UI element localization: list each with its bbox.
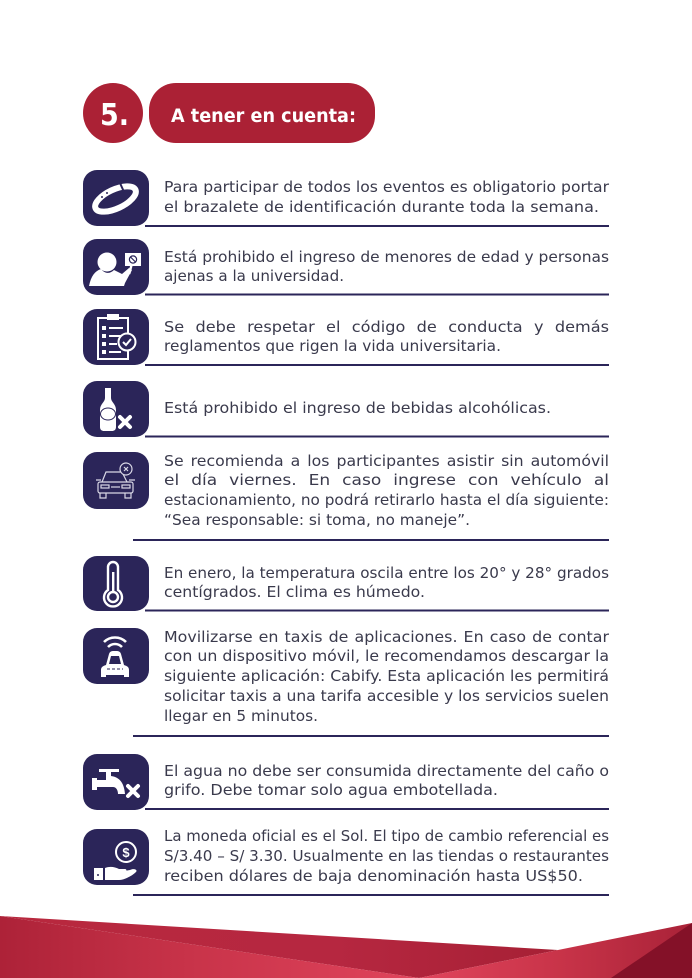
icon: hand holding coin: $ [122,845,130,860]
text: bracelet rule: el brazalete de identificación durante toda la semana. [164,198,599,216]
text: code of conduct: Se debe respetar el código de conducta y demás [164,318,609,336]
text: no car [164,452,609,529]
text: no car: Se recomienda a los participantes asistir sin automóvil [164,452,609,470]
text: temperature [164,564,609,601]
text: app taxis: siguiente aplicación: Cabify. Esta aplicación les permitirá [164,667,609,685]
item 1: bracelet rule [83,170,610,226]
text: app taxis: llegar en 5 minutos. [164,707,318,725]
section number badge: 5. [100,98,129,133]
text: no car: el día viernes. En caso ingrese con vehículo al [164,471,609,489]
text: currency: S/3.40 – S/ 3.30. Usualmente en las tiendas o restaurantes [164,847,609,865]
item 7: app taxis [83,628,610,736]
icon: clipboard with check [98,314,136,359]
text: minors prohibited [164,248,609,285]
item 9: currency [83,827,609,895]
icon: bracelet [92,181,139,217]
footer: red angular band [0,916,692,978]
text: no car: estacionamiento, no podrá retirarlo hasta el día siguiente: [164,491,609,509]
text: currency: reciben dólares de baja denominación hasta US$50. [164,867,583,885]
text: bracelet rule: Para participar de todos los eventos es obligatorio portar [164,178,610,196]
text: code of conduct: reglamentos que rigen la vida universitaria. [164,337,501,355]
item 3: code of conduct [83,309,609,365]
icon: person with sign [89,252,141,286]
text: minors prohibited: Está prohibido el ingreso de menores de edad y personas [164,248,609,266]
item 5: no car [83,452,609,540]
text: no car: “Sea responsable: si toma, no maneje”. [164,511,470,529]
item 8: tap water [83,754,609,810]
text: minors prohibited: ajenas a la universidad. [164,267,344,285]
text: code of conduct [164,318,609,355]
text: tap water: grifo. Debe tomar solo agua embotellada. [164,781,498,799]
text: currency [164,827,609,885]
text: temperature: En enero, la temperatura oscila entre los 20° y 28° grados [164,564,609,582]
text: alcohol prohibited: Está prohibido el ingreso de bebidas alcohólicas. [164,399,551,417]
icon: connected taxi [101,638,129,677]
text: app taxis [164,628,610,725]
icon: car with cross [96,463,135,498]
heading pill [149,83,375,143]
text: app taxis: con un dispositivo móvil, le recomendamos descargar la [164,647,609,665]
item 6: temperature [83,556,609,611]
icon: thermometer [104,562,122,606]
text: tap water [164,762,609,799]
text: currency: La moneda oficial es el Sol. El tipo de cambio referencial es [164,827,609,845]
text: app taxis: solicitar taxis a una tarifa accesible y los servicios suelen [164,687,609,705]
icon: hand holding coin [94,842,137,880]
icon: bottle with cross [100,388,130,431]
item 2: minors prohibited [83,239,609,295]
text: bracelet rule [164,178,610,216]
text: temperature: centígrados. El clima es húmedo. [164,583,425,601]
text: app taxis: Movilizarse en taxis de aplicaciones. En caso de contar [164,628,610,646]
section number badge [83,83,143,143]
text: tap water: El agua no debe ser consumida directamente del caño o [164,762,609,780]
item 4: alcohol prohibited [83,381,609,437]
heading pill: A tener en cuenta: [171,105,356,127]
icon: faucet with cross [92,769,138,796]
